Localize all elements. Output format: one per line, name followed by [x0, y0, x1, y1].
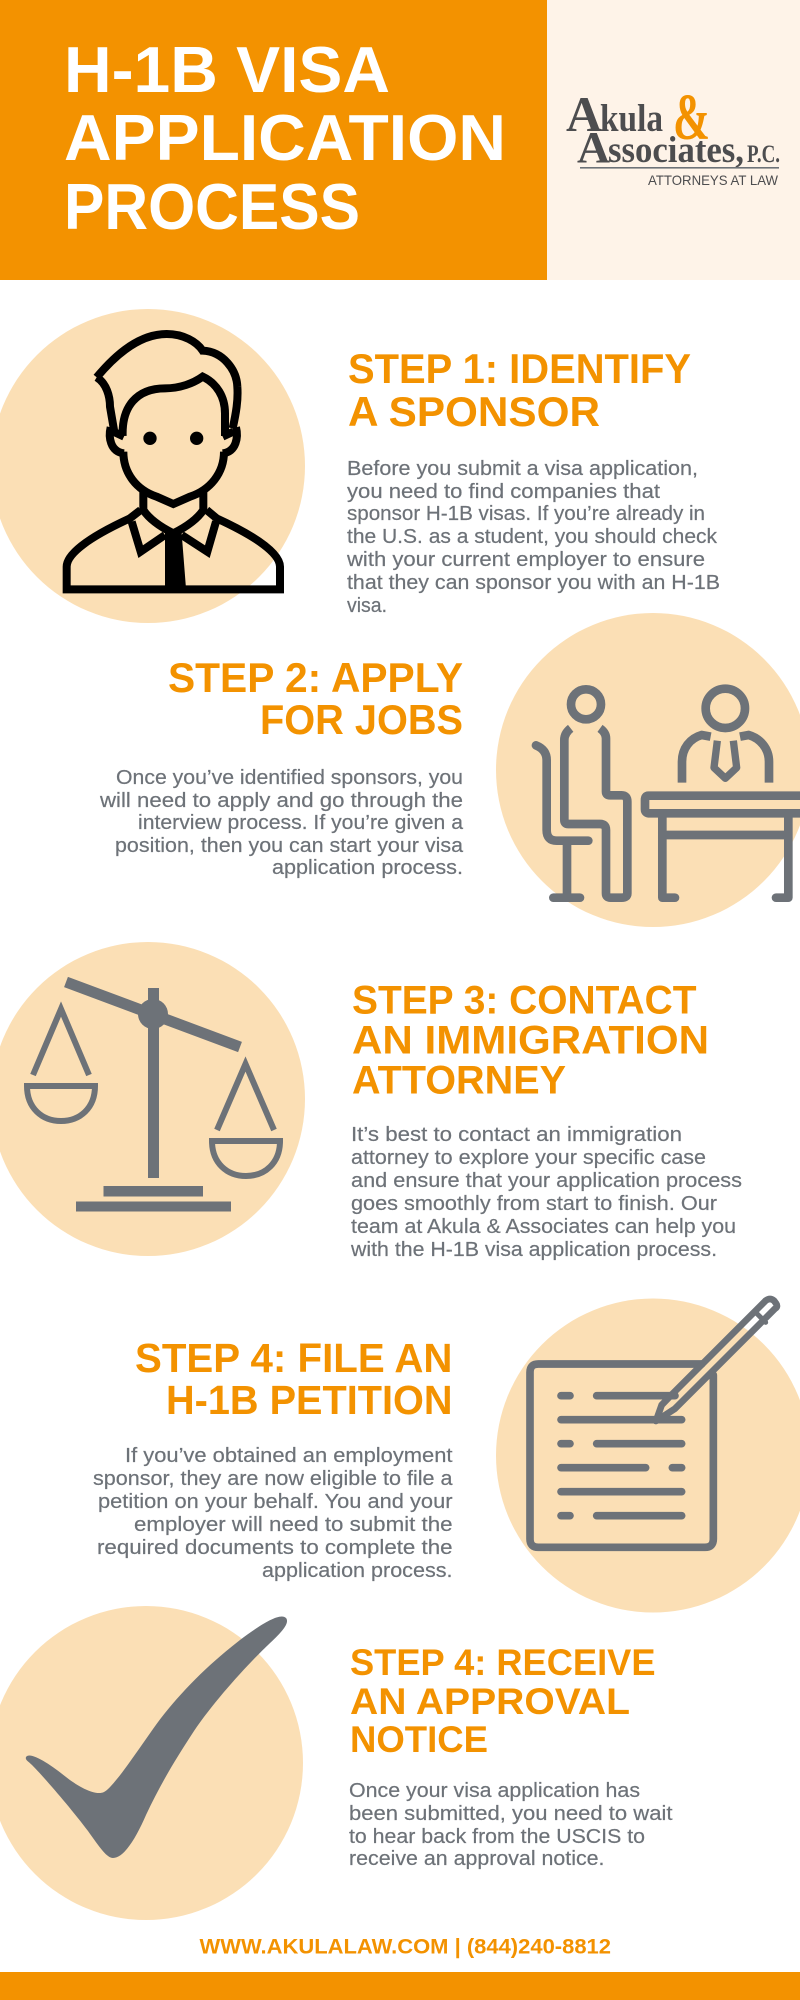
heading: step 4 approval	[350, 1642, 656, 1760]
text block: step 3: and ensure that your application process	[351, 1170, 742, 1192]
text block: step 1: Before you submit a visa application,	[347, 458, 698, 480]
icon circle: step 1	[0, 309, 305, 623]
text block: step 4 file	[93, 1445, 453, 1582]
text block: step 4 file: application process.	[262, 1560, 452, 1582]
logo: Akula & Associates: ATTORNEYS AT LAW	[648, 172, 779, 188]
text block: step 3: attorney to explore your specific case	[351, 1147, 706, 1169]
heading: step 3: AN IMMIGRATION	[352, 1018, 709, 1062]
text block: step 2: will need to apply and go through the	[99, 790, 463, 812]
panel: step 4 file petition	[93, 1298, 800, 1612]
text block: step 4 file: If you’ve obtained an employment	[125, 1445, 453, 1467]
heading: step 3	[352, 978, 709, 1102]
heading: step 4 file: STEP 4: FILE AN	[135, 1335, 452, 1381]
text block: step 4 file: required documents to complete the	[97, 1537, 452, 1559]
heading: step 4 file: H-1B PETITION	[166, 1377, 452, 1423]
text block: step 3: It’s best to contact an immigration	[351, 1124, 682, 1146]
icon circle: step 3	[0, 942, 305, 1256]
text block: step 4 approval	[349, 1780, 673, 1870]
text block: step 1: sponsor H-1B visas. If you’re already in	[347, 503, 705, 525]
title: PROCESS	[64, 170, 360, 243]
heading: step 1: A SPONSOR	[348, 388, 600, 435]
logo: Akula & Associates: &	[673, 81, 710, 154]
icon circle: step 4 approval	[0, 1606, 303, 1920]
text block: step 1: the U.S. as a student, you should check	[347, 526, 718, 548]
text block: step 4 file: petition on your behalf. You and your	[98, 1491, 453, 1513]
text block: step 2	[99, 767, 464, 879]
panel: step 1	[0, 309, 720, 623]
logo: Akula & Associates: A	[566, 86, 602, 142]
title: APPLICATION	[64, 101, 506, 174]
text block: step 2: Once you’ve identified sponsors, you	[116, 767, 463, 789]
heading: step 2: FOR JOBS	[260, 696, 463, 743]
icon: document and pencil	[530, 1299, 777, 1547]
text block: step 1: with your current employer to ensure	[346, 549, 705, 571]
heading: step 2: STEP 2: APPLY	[168, 654, 463, 701]
icon: scales of justice	[27, 982, 280, 1212]
text block: step 3	[350, 1124, 742, 1261]
text block: step 4 file: sponsor, they are now eligible to file a	[93, 1468, 453, 1490]
footer bar	[0, 1972, 800, 2000]
text block: step 4 approval: to hear back from the USCIS to	[349, 1826, 645, 1848]
heading: step 3: STEP 3: CONTACT	[352, 978, 696, 1022]
icon: businessman	[67, 334, 280, 589]
panel: step 4 approval	[0, 1606, 673, 1920]
title: H-1B VISA	[64, 33, 390, 106]
icon circle: step 4 file	[496, 1298, 800, 1612]
logo: Akula & Associates: A	[577, 123, 610, 172]
text block: step 4 approval: receive an approval notice.	[349, 1848, 604, 1870]
text block: step 1: that they can sponsor you with an H-1B	[347, 572, 720, 594]
heading: step 4 approval: AN APPROVAL	[350, 1681, 630, 1722]
header band	[0, 0, 800, 280]
text block: step 1: you need to find companies that	[347, 481, 660, 503]
text block: step 3: with the H-1B visa application process.	[350, 1239, 717, 1261]
panel: step 3	[0, 942, 742, 1261]
panel: step 2	[99, 613, 800, 927]
text block: step 4 approval: been submitted, you need to wait	[349, 1803, 673, 1825]
logo: Akula & Associates	[566, 81, 780, 188]
text block: step 2: position, then you can start your visa	[115, 835, 464, 857]
text block: step 4 approval: Once your visa application has	[349, 1780, 640, 1802]
heading: step 4 approval: STEP 4: RECEIVE	[350, 1642, 656, 1683]
logo: Akula & Associates: ssociates,	[608, 130, 744, 171]
text block: step 2: application process.	[272, 857, 463, 879]
heading: step 3: ATTORNEY	[352, 1058, 566, 1102]
text block: step 3: team at Akula & Associates can help you	[351, 1216, 736, 1238]
text block: step 1: visa.	[347, 595, 387, 617]
icon circle: step 2	[496, 613, 800, 927]
text block: step 2: interview process. If you’re given a	[138, 812, 464, 834]
icon: check mark	[26, 1617, 287, 1858]
title	[64, 33, 506, 243]
text block: step 1	[346, 458, 720, 617]
heading: step 2	[168, 654, 463, 743]
heading: step 1: STEP 1: IDENTIFY	[348, 345, 691, 392]
logo: Akula & Associates: kula	[600, 97, 663, 140]
text block: step 4 file: employer will need to submit the	[134, 1514, 452, 1536]
heading: step 1	[348, 345, 691, 435]
footer contact line: WWW.AKULALAW.COM | (844)240-8812	[200, 1936, 611, 1958]
heading: step 4 file	[135, 1335, 452, 1423]
icon: job interview	[536, 689, 800, 898]
text block: step 3: goes smoothly from start to finish. Our	[351, 1193, 717, 1215]
heading: step 4 approval: NOTICE	[350, 1719, 488, 1760]
logo: Akula & Associates: P.C.	[747, 141, 780, 168]
